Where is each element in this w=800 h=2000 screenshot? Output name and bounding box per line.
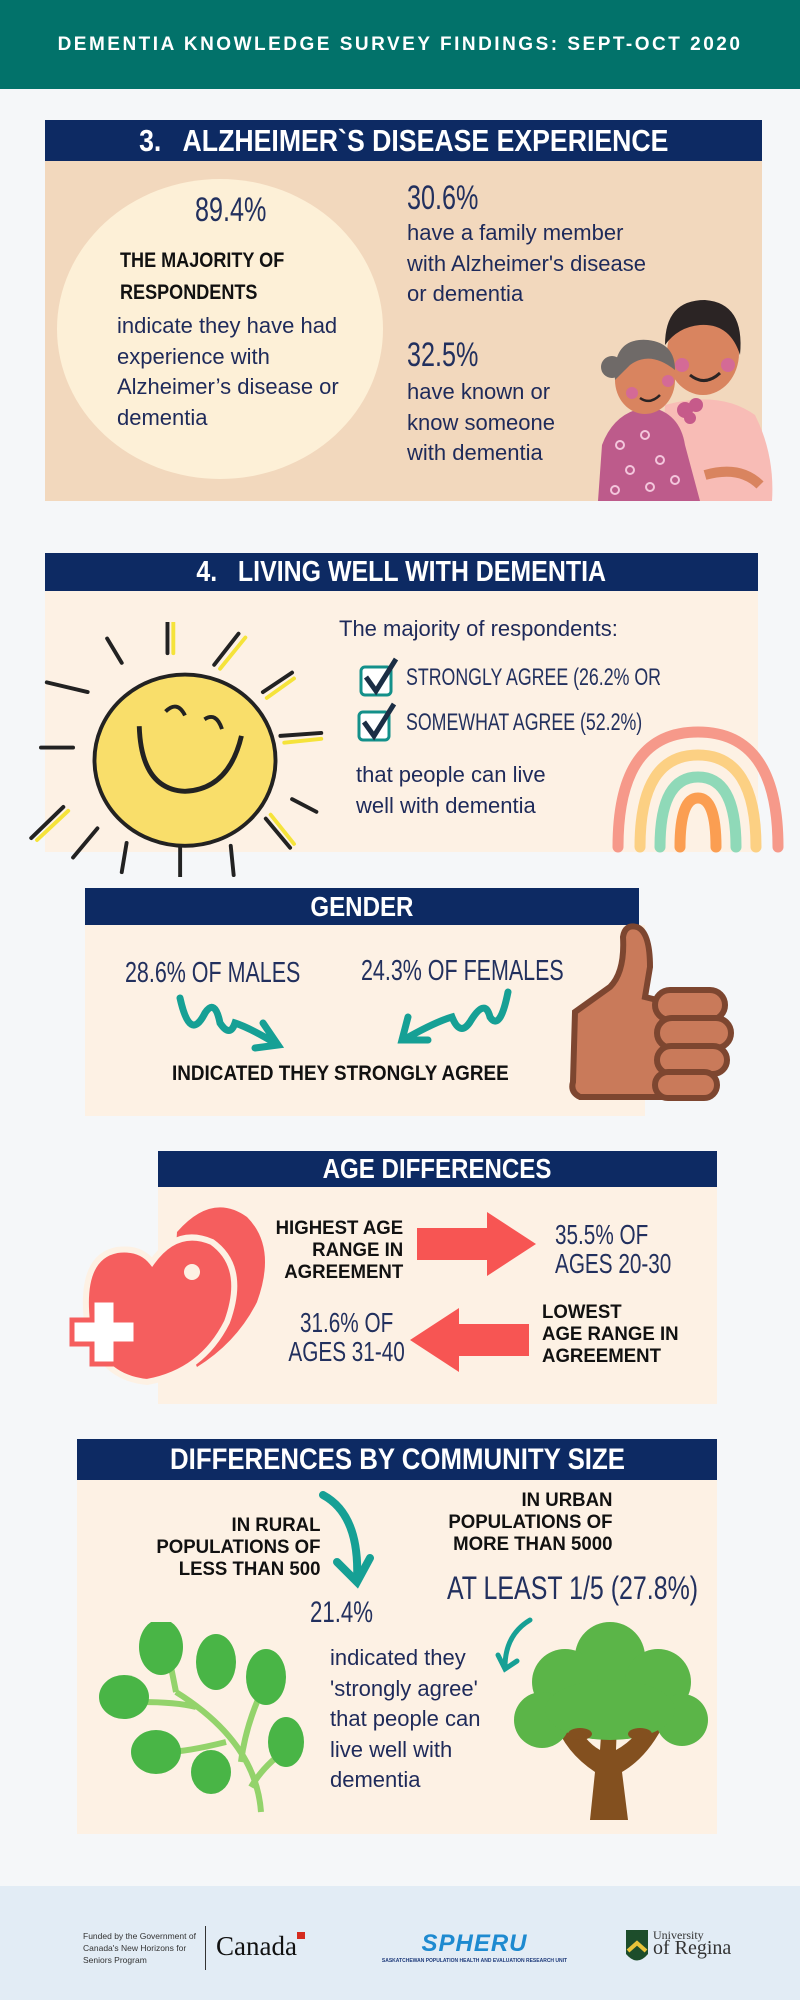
section 3 title: [45, 120, 762, 161]
icon: tree: [514, 1622, 708, 1820]
text: strongly agree: live well with: [330, 1736, 452, 1762]
stat 89.4%: 89.4%: [195, 191, 266, 229]
majority text: indicate they have had: [117, 313, 337, 338]
age title: AGE DIFFERENCES: [323, 1153, 552, 1184]
logo: university of regina: of Regina: [653, 1937, 731, 1959]
text: strongly agree: dementia: [330, 1767, 421, 1792]
stat 35.5%: 35.5% OF: [555, 1219, 648, 1250]
text: strongly agree: that people can: [330, 1706, 480, 1731]
header banner: DEMENTIA KNOWLEDGE SURVEY FINDINGS: SEPT-OCT 2020: [58, 34, 742, 55]
section 3 title: 3. ALZHEIMER`S DISEASE EXPERIENCE: [139, 123, 668, 158]
arrow: males: [176, 994, 284, 1052]
family text: with Alzheimer's disease: [407, 250, 646, 276]
panel: alzheimer's experience: [45, 161, 762, 501]
icon: checkbox 1: [360, 658, 398, 696]
majority text: dementia: [117, 404, 208, 430]
arrow: right: [417, 1212, 536, 1276]
illustration: couple: [598, 300, 772, 501]
highest label: RANGE IN: [312, 1240, 403, 1261]
known text: have known or: [407, 379, 550, 404]
arrow: rural: [319, 1491, 374, 1589]
stat 35.5%: AGES 20-30: [555, 1248, 671, 1279]
section 4 title: 4. LIVING WELL WITH DEMENTIA: [197, 556, 606, 588]
majority text: [117, 313, 339, 430]
icon: branch: [99, 1622, 304, 1812]
panel: living well: [45, 591, 758, 852]
footer: [0, 1886, 800, 2000]
text: strongly agree: indicated they: [330, 1645, 466, 1670]
known text: with dementia: [407, 440, 543, 465]
logo: university of regina: University: [653, 1928, 704, 1942]
family text: or dementia: [407, 281, 523, 306]
stat females: 24.3% OF FEMALES: [361, 955, 564, 987]
text: live well: [356, 762, 546, 818]
known text: [407, 379, 555, 465]
strongly agree label: INDICATED THEY STRONGLY AGREE: [172, 1062, 509, 1085]
logo: spheru: SASKATCHEWAN POPULATION HEALTH AND EVALUATION RESEARCH UNIT: [382, 1958, 567, 1964]
majority heading: [120, 249, 284, 304]
urban label: POPULATIONS OF: [448, 1512, 612, 1533]
stat 31.6%: AGES 31-40: [288, 1336, 405, 1367]
text: strongly agree: [330, 1645, 480, 1792]
lowest label: LOWEST: [542, 1302, 622, 1323]
highest label: HIGHEST AGE: [275, 1218, 403, 1239]
stat 31.6%: [288, 1307, 405, 1367]
majority heading: THE MAJORITY OF: [120, 249, 284, 272]
section 4 title: [45, 553, 758, 591]
text: live well: that people can live: [356, 762, 546, 787]
rural label: IN RURAL: [231, 1515, 320, 1536]
highest label: AGREEMENT: [284, 1262, 403, 1283]
rural label: LESS THAN 500: [178, 1559, 320, 1580]
lowest label: AGE RANGE IN: [542, 1324, 679, 1345]
community title: [77, 1439, 717, 1480]
majority text: experience with: [117, 344, 270, 368]
logo: canada: Canada: [216, 1931, 297, 1961]
logo: university of regina: [626, 1928, 731, 1960]
text: strongly agree: 'strongly agree': [330, 1676, 478, 1700]
gender title: GENDER: [310, 891, 414, 922]
highest label: [275, 1218, 404, 1283]
header banner: [0, 0, 800, 89]
gender title: [85, 888, 639, 925]
icon: sun: [29, 622, 324, 877]
option: strongly agree: STRONGLY AGREE (26.2% OR: [406, 664, 661, 691]
stat 35.5%: [555, 1219, 671, 1279]
text: majority: The majority of respondents:: [339, 616, 618, 641]
icon: heart: [70, 1207, 265, 1385]
lowest label: AGREEMENT: [542, 1346, 661, 1367]
panel: community size: [77, 1480, 717, 1834]
rural label: [156, 1515, 320, 1580]
panel: gender: [85, 925, 645, 1116]
text: live well: well with dementia: [356, 792, 536, 818]
urban label: IN URBAN: [521, 1490, 612, 1511]
majority heading: RESPONDENTS: [120, 281, 257, 304]
lowest label: [542, 1302, 679, 1367]
logo: spheru: SPHERU: [421, 1930, 528, 1957]
arrow: left: [410, 1308, 529, 1372]
urban label: MORE THAN 5000: [453, 1534, 612, 1555]
checklist: [358, 658, 661, 742]
arrow: urban: [496, 1618, 532, 1673]
icon: rainbow: [612, 726, 784, 852]
panel: age: [158, 1187, 717, 1404]
community title: DIFFERENCES BY COMMUNITY SIZE: [170, 1443, 624, 1476]
stat 31.6%: 31.6% OF: [300, 1307, 393, 1338]
stat 32.5%: 32.5%: [407, 336, 478, 374]
stat 27.8%: AT LEAST 1/5 (27.8%): [447, 1570, 698, 1606]
option: somewhat agree: SOMEWHAT AGREE (52.2%): [406, 709, 642, 736]
age title: [158, 1151, 717, 1187]
stat 30.6%: 30.6%: [407, 179, 478, 217]
icon: thumbs up: [569, 923, 734, 1101]
icon: checkbox 2: [358, 702, 396, 742]
family text: have a family member: [407, 220, 623, 245]
circle callout: [57, 179, 383, 479]
majority text: Alzheimer’s disease or: [117, 374, 339, 399]
rural label: POPULATIONS OF: [156, 1537, 320, 1558]
funding text: Funded by the Government of Canada's New Horizons for Seniors Program: [83, 1931, 196, 1965]
logo: canada: [205, 1926, 305, 1970]
known text: know someone: [407, 410, 555, 434]
stat males: 28.6% OF MALES: [125, 957, 300, 989]
family text: [407, 220, 646, 306]
stat 21.4%: 21.4%: [310, 1596, 373, 1629]
arrow: females: [398, 988, 512, 1044]
logo: spheru: [382, 1930, 567, 1964]
urban label: [448, 1490, 612, 1555]
